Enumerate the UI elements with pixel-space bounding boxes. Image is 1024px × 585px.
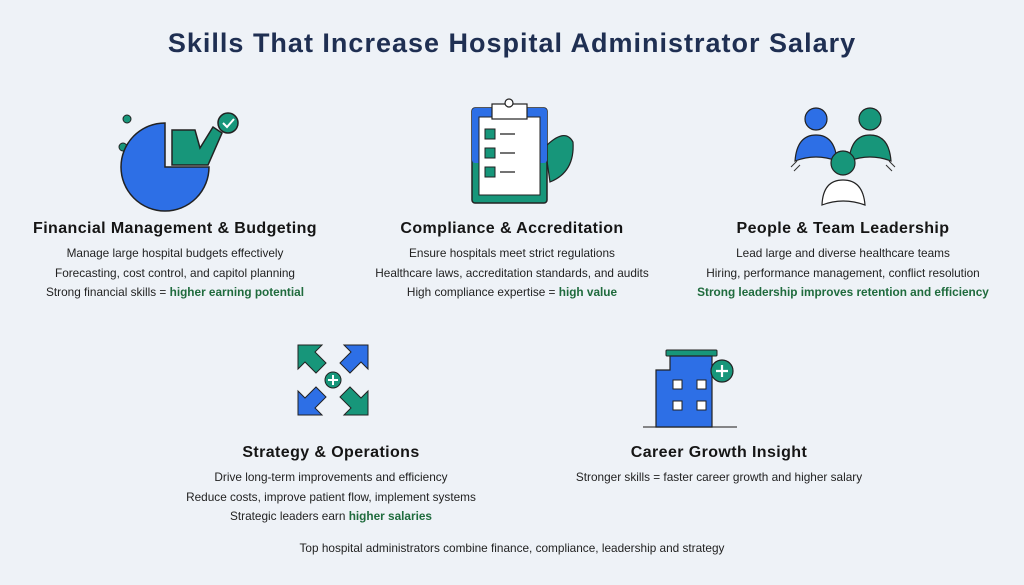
panel: strategy	[186, 444, 476, 523]
panel: leadership: People & Team Leadership	[737, 220, 949, 237]
panel: compliance: Healthcare laws, accreditation standards, and audits	[375, 266, 649, 280]
panel: compliance	[375, 220, 649, 299]
panel: leadership: Hiring, performance management, conflict resolution	[706, 266, 980, 280]
panel: leadership: Strong leadership improves retention and efficiency	[697, 285, 989, 299]
panel: strategy: Reduce costs, improve patient flow, implement systems	[186, 490, 476, 504]
panel: financial	[33, 220, 317, 299]
panel: career growth: Career Growth Insight	[631, 444, 807, 461]
icon: hospital building	[643, 350, 737, 428]
icon: clipboard	[471, 98, 574, 204]
panel: leadership	[697, 220, 989, 299]
panel: financial: Forecasting, cost control, and capitol planning	[55, 266, 295, 280]
title: Skills That Increase Hospital Administrator Salary	[168, 28, 856, 58]
panel: compliance: Ensure hospitals meet strict regulations	[409, 246, 615, 260]
panel: career growth	[576, 444, 862, 484]
icon: arrows	[298, 344, 368, 416]
panel: financial: Strong financial skills = higher earning potential	[46, 285, 304, 299]
footer: Top hospital administrators combine finance, compliance, leadership and strategy	[300, 541, 724, 555]
panel: compliance: Compliance & Accreditation	[400, 220, 624, 237]
panel: career growth: Stronger skills = faster career growth and higher salary	[576, 470, 862, 484]
panel: financial: Manage large hospital budgets effectively	[67, 246, 283, 260]
panel: financial: Financial Management & Budgeting	[33, 220, 317, 237]
icon: pie chart with check	[118, 112, 239, 212]
panel: compliance: High compliance expertise = high value	[407, 285, 617, 299]
icon: team	[790, 107, 896, 206]
panel: strategy: Strategic leaders earn higher salaries	[230, 509, 432, 523]
panel: leadership: Lead large and diverse healthcare teams	[736, 246, 950, 260]
panel: strategy: Drive long-term improvements and efficiency	[214, 470, 448, 484]
panel: strategy: Strategy & Operations	[242, 444, 420, 461]
